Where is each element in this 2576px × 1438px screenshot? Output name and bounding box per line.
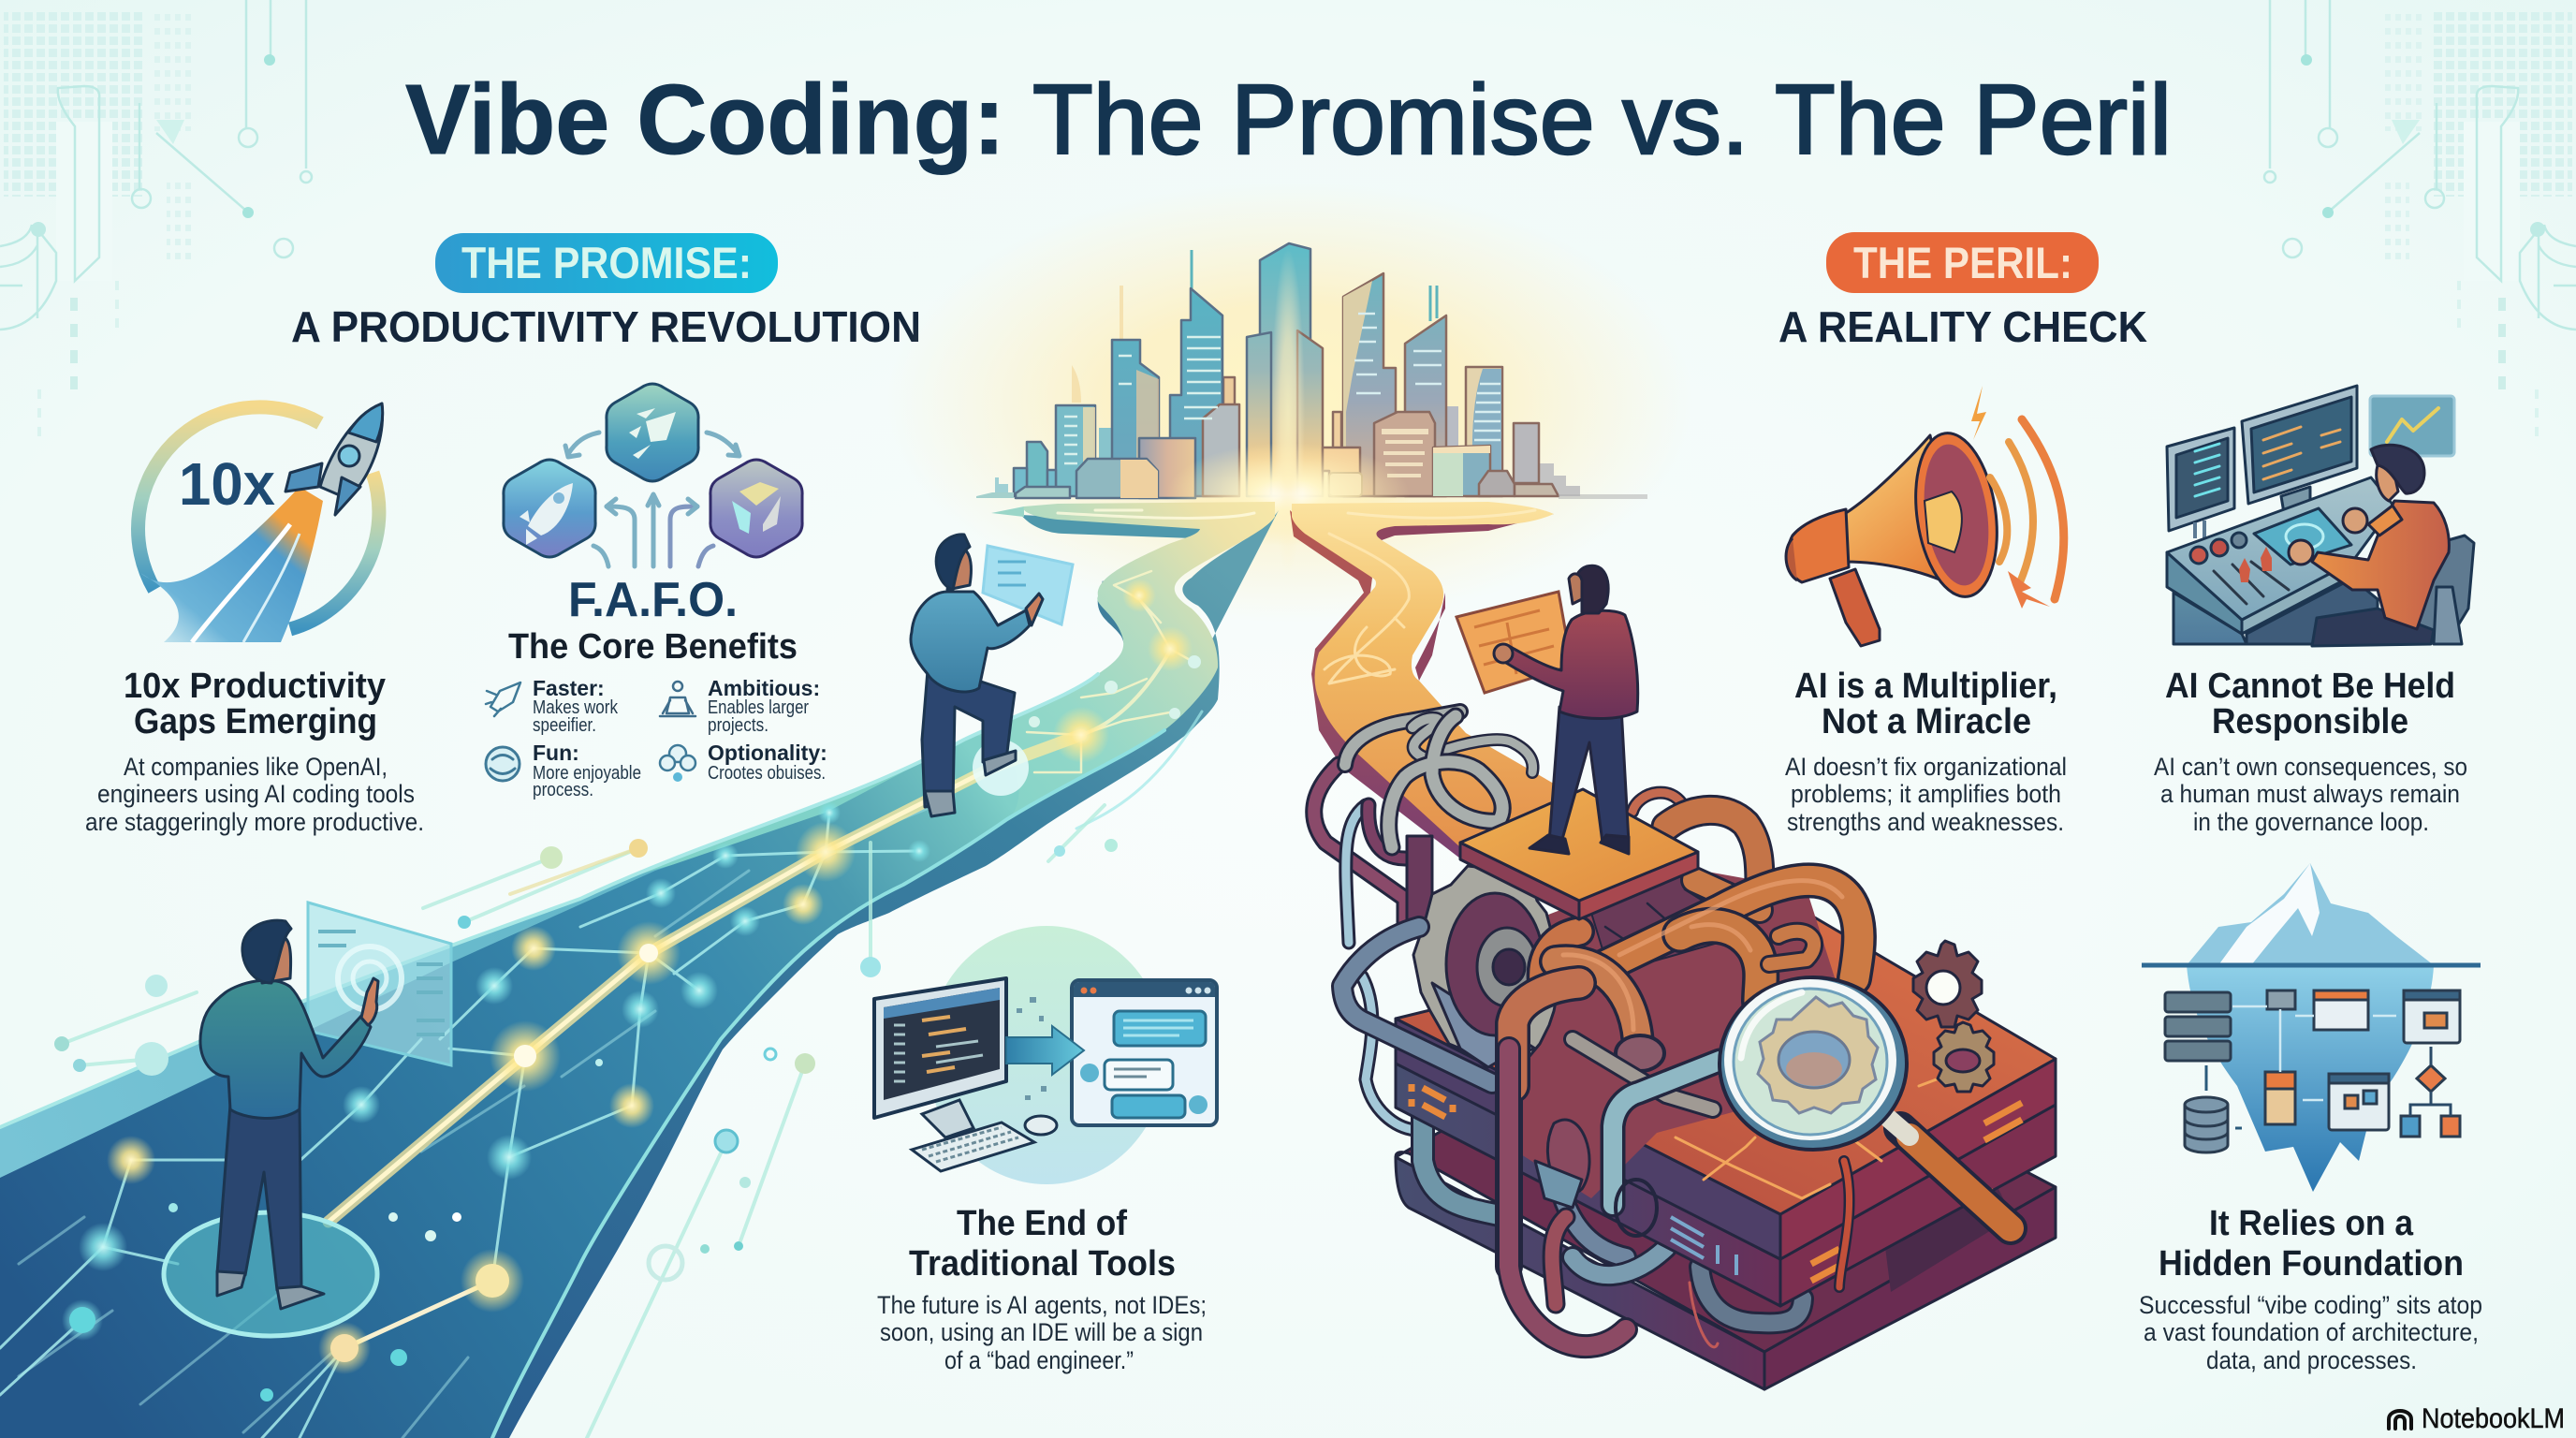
icon: end of traditional tools (874, 926, 1217, 1184)
benefit: optionality: Crootes obuises. (708, 763, 826, 784)
benefit: faster: speeifier. (533, 715, 596, 736)
circuit decoration right (2264, 0, 2576, 445)
benefit: optionality: Optionality: (708, 741, 827, 765)
tablet hologram (983, 546, 1073, 624)
text: hidden foundation: It Relies on a (2209, 1204, 2414, 1243)
standing platform (1460, 789, 1698, 919)
road surface (0, 502, 1275, 1438)
top tier (1396, 917, 2056, 1259)
large gear (1413, 863, 1561, 1067)
server lights (1412, 1084, 2022, 1281)
icon: megaphone (1786, 386, 2064, 646)
base tier (1396, 992, 2056, 1389)
subheading: a productivity revolution: A PRODUCTIVITY REVOLUTION (291, 302, 921, 351)
right towers (1323, 273, 1647, 499)
small gears (1913, 941, 1994, 1092)
text: end of traditional tools: of a “bad engineer.” (944, 1346, 1134, 1374)
benefit: faster: Makes work (533, 697, 619, 718)
benefit: optionality (660, 741, 827, 784)
chat window (1072, 980, 1217, 1125)
title: Vibe Coding: (405, 65, 1005, 175)
central mass behind pipes (1516, 866, 1839, 1198)
hexagon icons (504, 384, 802, 557)
back cables (1314, 765, 1432, 1130)
iceberg under water (2187, 965, 2434, 1192)
title (405, 65, 2172, 175)
text: AI cannot be held responsible: a human must always remain (2160, 780, 2460, 808)
cables between tiers (1423, 1105, 1803, 1347)
desk (2167, 477, 2393, 644)
golden data path (329, 510, 1254, 1222)
text: hidden foundation (2139, 1204, 2482, 1374)
benefit: fun: More enjoyable (533, 763, 641, 784)
person: engineer on peril platform (1456, 565, 1638, 854)
benefit: faster: Faster: (533, 676, 605, 700)
network nodes (62, 801, 930, 1401)
F.A.F.O. heading: F.A.F.O. (568, 573, 738, 627)
database (2185, 1097, 2228, 1152)
monitors (2167, 386, 2357, 538)
magnifying glass (1720, 977, 2011, 1228)
text: 10x productivity: At companies like OpenAI, (124, 753, 388, 781)
text: 10x productivity (85, 667, 424, 836)
road: the promise path (0, 502, 1279, 1438)
road streaks (19, 805, 936, 1438)
road side particles (54, 805, 1118, 1438)
text: 10x productivity: 10x Productivity (124, 667, 386, 706)
benefit: ambitious: projects. (708, 715, 768, 736)
text: end of traditional tools: The future is AI agents, not IDEs; (877, 1291, 1207, 1319)
left steel cable (1342, 927, 1492, 1083)
middle tier (1396, 1061, 2056, 1306)
text: AI is a multiplier (1785, 667, 2067, 836)
title: The Promise vs. The Peril (1032, 65, 2172, 175)
benefit: fun (486, 741, 641, 800)
F.A.F.O. core benefits (486, 384, 827, 800)
text: 10x productivity: Gaps Emerging (134, 702, 377, 741)
text: AI is a multiplier: strengths and weaknesses. (1787, 808, 2064, 836)
text: AI is a multiplier: problems; it amplifies both (1791, 780, 2061, 808)
small lower gears (1535, 1120, 1589, 1208)
icon: 10x rocket: 10x (179, 450, 275, 518)
copper pipes (1509, 793, 1859, 1346)
data cards (2265, 990, 2460, 1137)
monitor (874, 978, 1006, 1137)
pill: the promise: THE PROMISE: (461, 238, 752, 287)
core benefits subheading: The Core Benefits (508, 627, 798, 667)
text: AI cannot be held responsible: AI Cannot Be Held (2165, 667, 2455, 706)
left section heading (291, 233, 921, 351)
text: AI cannot be held responsible: AI can’t own consequences, so (2154, 753, 2467, 781)
text: end of traditional tools (877, 1204, 1207, 1374)
road: the peril path (1290, 502, 1591, 858)
benefit: fun: Fun: (533, 741, 579, 765)
city skyline (887, 0, 1692, 623)
benefit: fun: process. (533, 780, 593, 800)
text: AI is a multiplier: AI is a Multiplier, (1794, 667, 2057, 706)
chart card (2370, 396, 2454, 456)
far towers (1099, 243, 1458, 496)
text: hidden foundation: Hidden Foundation (2159, 1244, 2464, 1284)
hologram screen (308, 902, 451, 1065)
subheading: a reality check: A REALITY CHECK (1778, 302, 2147, 351)
benefit: faster (486, 676, 619, 736)
network lines (0, 813, 919, 1438)
text: hidden foundation: Successful “vibe coding” sits atop (2139, 1291, 2482, 1319)
arrow (1006, 1026, 1084, 1075)
benefit: ambitious: Ambitious: (708, 676, 820, 700)
circuit decoration left (0, 0, 312, 445)
text: 10x productivity: engineers using AI coding tools (97, 780, 415, 808)
pill: the peril: THE PERIL: (1853, 238, 2072, 287)
person: climber on road (911, 535, 1073, 816)
text: AI is a multiplier: Not a Miracle (1822, 702, 2031, 741)
text: hidden foundation: data, and processes. (2206, 1346, 2417, 1374)
text: AI cannot be held responsible: Responsible (2212, 702, 2408, 741)
text: AI cannot be held responsible: in the governance loop. (2193, 808, 2429, 836)
iceberg above water (2187, 863, 2434, 965)
text: AI cannot be held responsible (2154, 667, 2467, 836)
text: end of traditional tools: Traditional Tools (909, 1244, 1176, 1284)
text: end of traditional tools: The End of (957, 1204, 1127, 1243)
lobe underside and rim (492, 506, 1279, 1438)
text: 10x productivity: are staggeringly more productive. (85, 808, 424, 836)
operator figure (2312, 609, 2434, 646)
left towers (976, 0, 1239, 498)
text: AI is a multiplier: AI doesn’t fix organizational (1785, 753, 2067, 781)
keyboard and mouse (912, 1116, 1057, 1171)
icon: operator at control desk (2167, 386, 2474, 646)
tangled machine (1314, 712, 2056, 1389)
text: end of traditional tools: soon, using an IDE will be a sign (880, 1318, 1203, 1346)
text: hidden foundation: a vast foundation of architecture, (2144, 1318, 2479, 1346)
grey tangled knot (1345, 712, 1533, 847)
benefit: ambitious: Enables larger (708, 697, 809, 718)
icon: iceberg hidden foundation (2142, 863, 2481, 1192)
icon: 10x rocket (139, 404, 383, 642)
chair (2401, 536, 2474, 630)
benefit: ambitious (660, 676, 820, 736)
arrows between hexagons (565, 433, 739, 566)
servers (2165, 992, 2231, 1061)
right section heading (1778, 232, 2147, 351)
person: leader on promise road (164, 902, 451, 1336)
